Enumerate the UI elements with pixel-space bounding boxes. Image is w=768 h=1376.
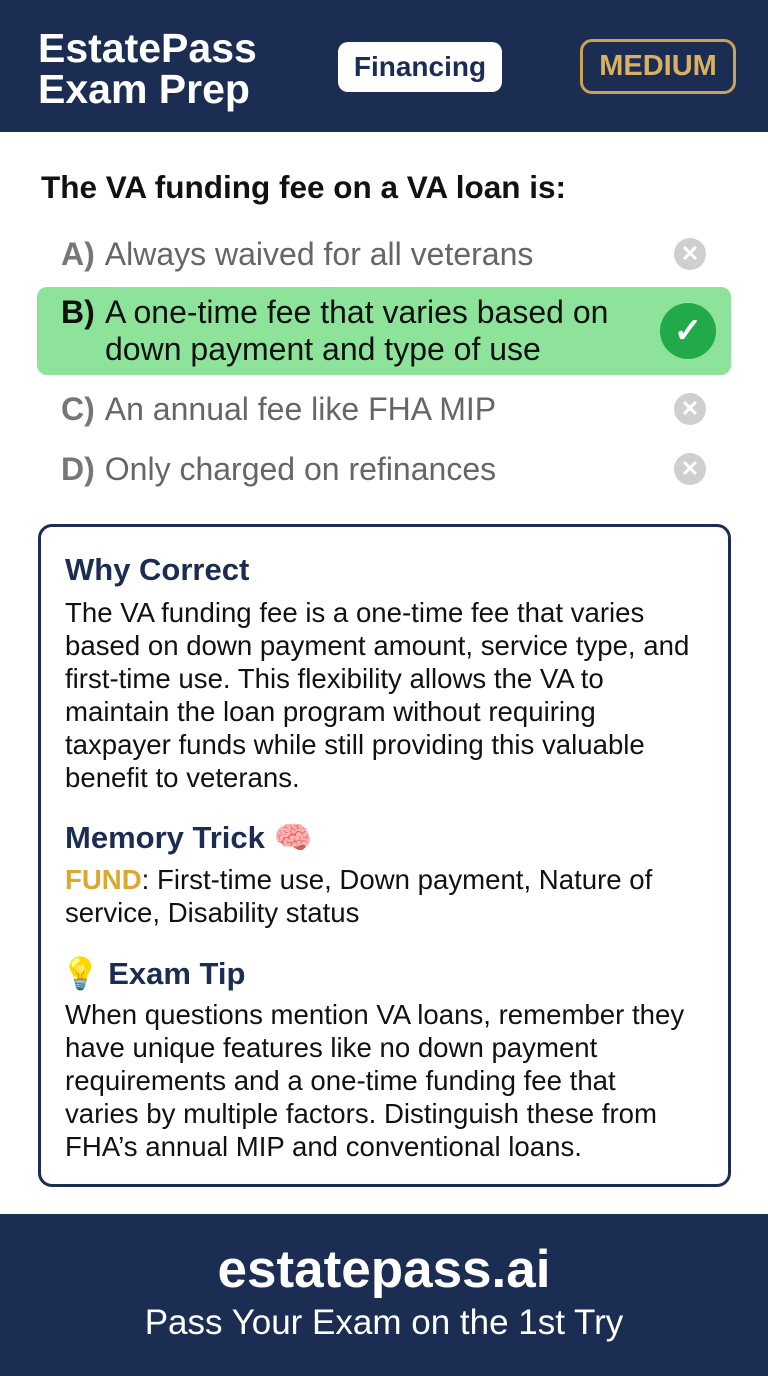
option D: D) Only charged on refinances <box>61 451 496 487</box>
category badge: Financing <box>354 51 486 82</box>
icon: x C <box>674 393 706 425</box>
text: why correct: The VA funding fee is a one-time fee that varies <box>65 597 644 628</box>
text: why correct <box>65 597 689 793</box>
text: why correct: taxpayer funds while still providing this valuable <box>65 729 645 760</box>
option C: C) An annual fee like FHA MIP <box>61 391 496 427</box>
footer tagline: Pass Your Exam on the 1st Try <box>145 1303 623 1342</box>
text: why correct: maintain the loan program without requiring <box>65 696 596 727</box>
icon: x A: ✕ <box>681 241 699 266</box>
option B correct: A one-time fee that varies based on <box>105 294 608 330</box>
text: exam tip: requirements and a one-time funding fee that <box>65 1065 616 1096</box>
heading: memory trick: Memory Trick 🧠 <box>65 820 312 855</box>
brand title <box>38 25 257 112</box>
icon: check <box>660 303 716 359</box>
text: why correct: benefit to veterans. <box>65 762 300 793</box>
text: exam tip: varies by multiple factors. Distinguish these from <box>65 1098 657 1129</box>
panel: explanation <box>38 524 731 1187</box>
icon: x D <box>674 453 706 485</box>
text: memory trick: service, Disability status <box>65 897 359 928</box>
text: memory trick: FUND: First-time use, Down payment, Nature of <box>65 864 652 895</box>
option B correct: down payment and type of use <box>105 331 541 367</box>
question: The VA funding fee on a VA loan is: <box>41 169 566 205</box>
heading: exam tip: 💡 Exam Tip <box>61 956 245 991</box>
brand title: Exam Prep <box>38 66 250 112</box>
category badge <box>338 42 502 92</box>
footer <box>0 1214 768 1376</box>
text: exam tip: FHA’s annual MIP and conventional loans. <box>65 1131 582 1162</box>
icon: x C: ✕ <box>681 396 699 421</box>
icon: x D: ✕ <box>681 456 699 481</box>
heading: why correct: Why Correct <box>65 552 249 587</box>
footer url: estatepass.ai <box>218 1240 550 1299</box>
text: exam tip <box>65 999 684 1162</box>
icon: check: ✓ <box>674 312 702 350</box>
text: why correct: first-time use. This flexibility allows the VA to <box>65 663 604 694</box>
text: why correct: based on down payment amount, service type, and <box>65 630 689 661</box>
option B correct: B) <box>61 294 95 330</box>
icon: x A <box>674 238 706 270</box>
brand title: EstatePass <box>38 25 257 71</box>
text: exam tip: have unique features like no down payment <box>65 1032 597 1063</box>
text: memory trick <box>65 864 652 928</box>
difficulty badge <box>580 39 736 94</box>
text: exam tip: When questions mention VA loans, remember they <box>65 999 684 1030</box>
option B correct <box>37 287 731 375</box>
option A: A) Always waived for all veterans <box>61 236 533 272</box>
header bar <box>0 0 768 132</box>
difficulty badge: MEDIUM <box>599 50 717 82</box>
